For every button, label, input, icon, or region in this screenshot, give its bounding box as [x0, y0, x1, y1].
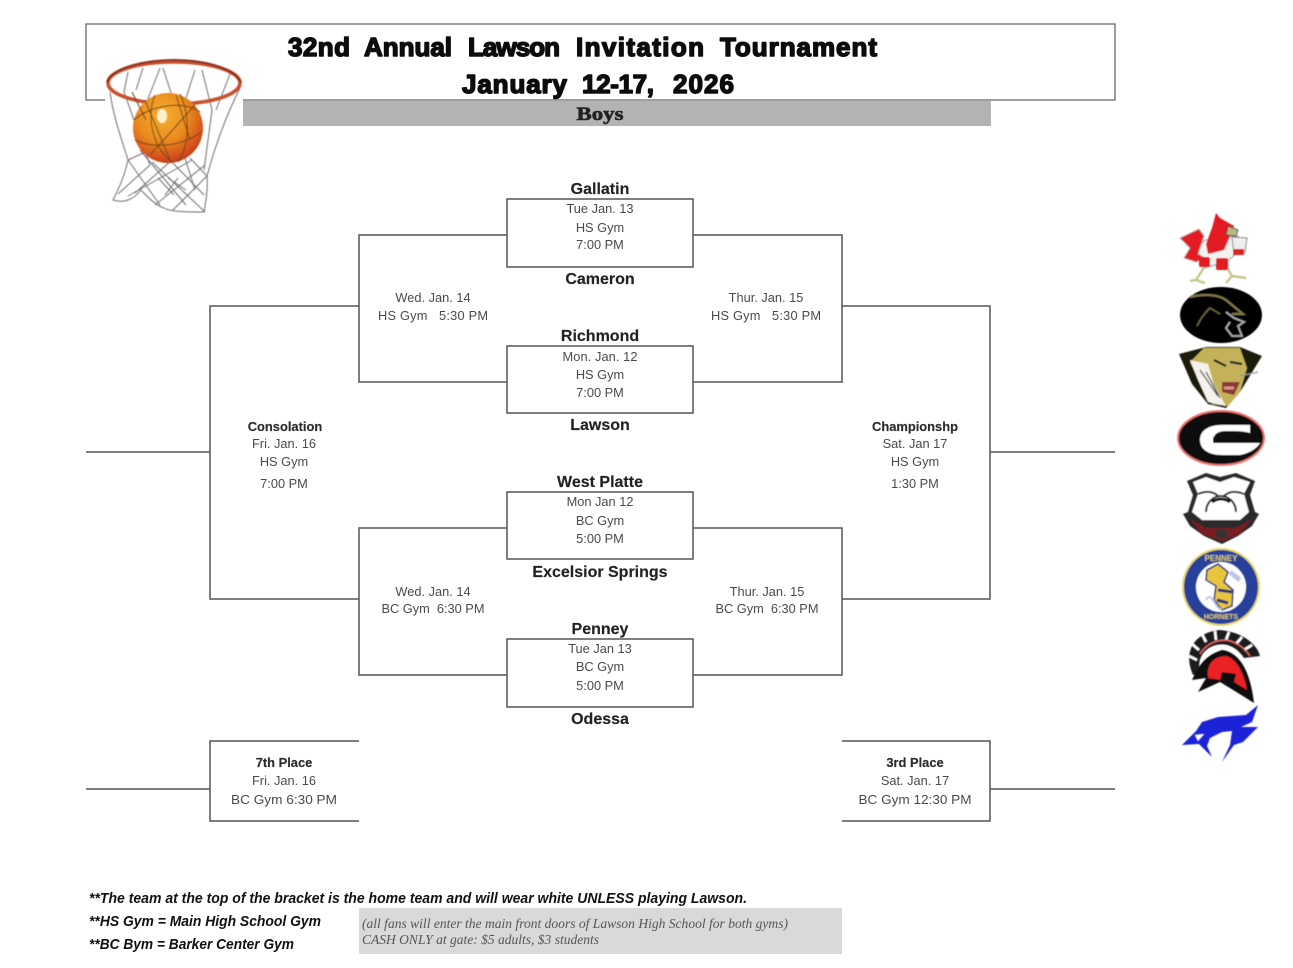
- icon: Spartan logo: [1189, 630, 1260, 703]
- title banner: [86, 24, 1115, 100]
- semifinal info left bottom: BC Gym 6:30 PM: [382, 601, 484, 616]
- title line 2: 2026: [673, 69, 734, 99]
- game 4: Penney vs Odessa: [568, 621, 632, 728]
- game 3: West Platte vs Excelsior Springs: West Platte: [557, 474, 643, 491]
- semifinal info left bottom: Wed. Jan. 14: [395, 584, 471, 599]
- 7th place game: BC Gym 6:30 PM: [231, 792, 337, 807]
- boys division bar: [243, 101, 991, 126]
- 3rd place game: Sat. Jan. 17: [881, 773, 949, 788]
- gate information note: (all fans will enter the main front doors of Lawson High School for both gyms): [362, 916, 788, 931]
- game 2: Richmond vs Lawson: Richmond: [561, 328, 639, 345]
- title line 2: January: [462, 69, 568, 99]
- footer notes: **BC Bym = Barker Center Gym: [89, 936, 294, 953]
- semifinal info right bottom: [716, 584, 818, 616]
- consolation game: Fri. Jan. 16: [252, 436, 316, 451]
- game 4: Penney vs Odessa: 5:00 PM: [576, 678, 624, 693]
- game 1: Gallatin vs Cameron: Cameron: [565, 271, 635, 288]
- championship game: 1:30 PM: [891, 476, 939, 491]
- icon: blue jay logo: [1182, 705, 1258, 762]
- icon: G logo: [1178, 411, 1264, 465]
- consolation game: HS Gym: [260, 454, 308, 469]
- consolation game: [248, 419, 322, 491]
- icon: Penney Hornets logo: [1182, 548, 1260, 626]
- icon: cardinal logo: [1180, 213, 1247, 283]
- title line 1: 32nd: [288, 32, 350, 62]
- championship game: Championshp: [872, 419, 958, 434]
- title line 1: Tournament: [720, 32, 877, 62]
- game 1: Gallatin vs Cameron: Tue Jan. 13: [566, 201, 634, 216]
- icon: Penney Hornets logo: HORNETS: [1204, 614, 1238, 621]
- game 3: West Platte vs Excelsior Springs: BC Gym: [576, 513, 624, 528]
- semifinal info right top: Thur. Jan. 15: [729, 290, 803, 305]
- championship game: Sat. Jan 17: [883, 436, 947, 451]
- game 2: Richmond vs Lawson: [561, 328, 639, 434]
- game 1: Gallatin vs Cameron: HS Gym: [576, 220, 624, 235]
- footer notes: **The team at the top of the bracket is the home team and will wear white UNLESS playing Lawson.: [89, 890, 747, 907]
- gate information note: [359, 908, 842, 954]
- title line 1: Annual: [364, 32, 452, 62]
- 3rd place game: BC Gym 12:30 PM: [858, 792, 972, 807]
- semifinal info right bottom: BC Gym 6:30 PM: [716, 601, 818, 616]
- game 3: West Platte vs Excelsior Springs: Excelsior Springs: [532, 564, 668, 581]
- title line 2: 12-17,: [582, 69, 654, 99]
- 7th place game: 7th Place: [256, 755, 312, 770]
- game 2: Richmond vs Lawson: Lawson: [570, 417, 630, 434]
- game 4: Penney vs Odessa: Odessa: [571, 711, 629, 728]
- game 2: Richmond vs Lawson: HS Gym: [576, 367, 624, 382]
- gate information note: CASH ONLY at gate: $5 adults, $3 students: [362, 932, 599, 947]
- 7th place game: Fri. Jan. 16: [252, 773, 316, 788]
- consolation game: 7:00 PM: [260, 476, 308, 491]
- semifinal info left bottom: [382, 584, 484, 616]
- boys division bar: Boys: [576, 104, 624, 125]
- semifinal info right top: [711, 290, 821, 323]
- icon: panther logo: [1180, 287, 1262, 343]
- semifinal info left top: HS Gym 5:30 PM: [378, 308, 488, 323]
- game 3: West Platte vs Excelsior Springs: Mon Jan 12: [567, 494, 633, 509]
- game 3: West Platte vs Excelsior Springs: [532, 474, 668, 581]
- semifinal info left top: Wed. Jan. 14: [395, 290, 471, 305]
- game 2: Richmond vs Lawson: 7:00 PM: [576, 385, 624, 400]
- game 4: Penney vs Odessa: Penney: [572, 621, 629, 638]
- semifinal info left top: [378, 290, 488, 323]
- title line 1: Lawson: [468, 32, 560, 62]
- semifinal info right top: HS Gym 5:30 PM: [711, 308, 821, 323]
- game 1: Gallatin vs Cameron: [565, 181, 635, 288]
- 3rd place game: 3rd Place: [886, 755, 944, 770]
- footer notes: [89, 890, 747, 953]
- bracket lines: [86, 199, 1115, 821]
- game 2: Richmond vs Lawson: Mon. Jan. 12: [562, 349, 638, 364]
- title line 1: [288, 32, 877, 62]
- icon: bulldog logo: [1183, 473, 1259, 544]
- icon: tiger logo: [1179, 347, 1262, 408]
- game 3: West Platte vs Excelsior Springs: 5:00 PM: [576, 531, 624, 546]
- title line 1: Invitation: [576, 32, 704, 62]
- semifinal info right bottom: Thur. Jan. 15: [730, 584, 804, 599]
- consolation game: Consolation: [248, 419, 322, 434]
- game 4: Penney vs Odessa: BC Gym: [576, 659, 624, 674]
- icon: Penney Hornets logo: PENNEY: [1205, 554, 1238, 563]
- 7th place game: [231, 755, 337, 807]
- championship game: HS Gym: [891, 454, 939, 469]
- game 1: Gallatin vs Cameron: 7:00 PM: [576, 237, 624, 252]
- footer notes: **HS Gym = Main High School Gym: [89, 913, 321, 930]
- game 4: Penney vs Odessa: Tue Jan 13: [568, 641, 632, 656]
- game 1: Gallatin vs Cameron: Gallatin: [571, 181, 629, 198]
- 3rd place game: [858, 755, 972, 807]
- championship game: [872, 419, 958, 491]
- title line 2: [462, 69, 734, 99]
- icon: basketball hoop and net: [107, 60, 241, 212]
